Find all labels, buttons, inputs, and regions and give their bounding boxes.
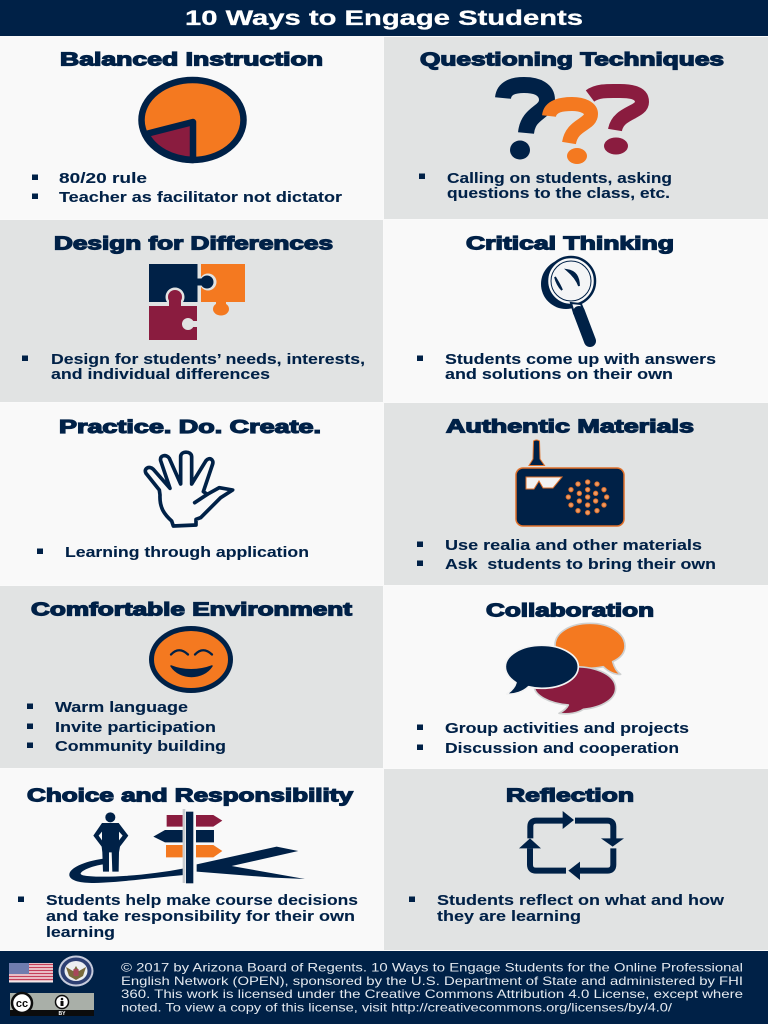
bullet list: Teacher as facilitator not dictator xyxy=(59,190,342,206)
panel: Collaboration xyxy=(384,586,768,768)
title banner: 10 Ways to Engage Students xyxy=(185,7,583,30)
copyright text xyxy=(121,960,743,1014)
icon: Creative Commons BY badge: cc xyxy=(16,998,28,1010)
panel: Authentic Materials xyxy=(384,403,768,585)
icon: question marks xyxy=(503,85,642,164)
heading: Collaboration: Collaboration xyxy=(486,600,654,620)
icon: smiley face xyxy=(152,628,230,690)
bullet list: Invite participation xyxy=(55,720,216,736)
heading: Practice. Do. Create.: Practice. Do. Create. xyxy=(59,417,321,437)
bullet list xyxy=(18,893,358,941)
footer band xyxy=(0,951,768,1024)
icon: pie chart xyxy=(142,80,244,160)
icon: cycle arrows xyxy=(519,811,624,880)
bullet list: Design for students’ needs, interests, xyxy=(51,352,365,368)
bullet list xyxy=(22,352,365,383)
heading: Authentic Materials: Authentic Materials xyxy=(446,416,694,436)
icon: speech bubbles xyxy=(505,623,625,714)
bullet list: and take responsibility for their own xyxy=(46,909,355,925)
bullet list: Calling on students, asking xyxy=(447,171,672,187)
panel: Practice. Do. Create. xyxy=(0,403,383,585)
bullet list: Warm language xyxy=(55,700,188,716)
icon: State Department seal xyxy=(58,956,94,986)
bullet list xyxy=(417,721,689,757)
bullet list: and individual differences xyxy=(51,367,270,383)
bullet list: Learning through application xyxy=(65,545,309,561)
bullet list: questions to the class, etc. xyxy=(447,186,670,202)
copyright text: noted. To view a copy of this license, visit http://creativecommons.org/licenses/by/4.0/ xyxy=(121,1000,673,1014)
icon: US flag xyxy=(9,963,53,982)
panel: Questioning Techniques xyxy=(384,37,768,219)
title banner xyxy=(0,0,768,36)
bullet list: they are learning xyxy=(437,909,581,925)
bullet list xyxy=(417,352,716,383)
icon: radio xyxy=(516,440,624,526)
heading: Questioning Techniques: Questioning Techniques xyxy=(420,50,724,70)
bullet list xyxy=(419,171,672,202)
panel: Design for Differences xyxy=(0,220,383,402)
bullet list: Students come up with answers xyxy=(445,352,716,368)
bullet list xyxy=(32,171,342,206)
panel: Reflection xyxy=(384,769,768,950)
panel: Critical Thinking xyxy=(384,220,768,402)
copyright text: 360. This work is licensed under the Creative Commons Attribution 4.0 License, except where xyxy=(121,987,743,1001)
bullet list: Students reflect on what and how xyxy=(437,893,725,909)
heading: Reflection: Reflection xyxy=(506,786,634,806)
panel: Comfortable Environment xyxy=(0,586,383,768)
bullet list: 80/20 rule xyxy=(59,171,147,187)
heading: Design for Differences: Design for Differences xyxy=(54,234,333,254)
icon: person at signpost on road xyxy=(69,809,305,883)
copyright text: © 2017 by Arizona Board of Regents. 10 Ways to Engage Students for the Online Professional xyxy=(121,960,743,974)
bullet list: Group activities and projects xyxy=(445,721,689,737)
bullet list: Community building xyxy=(55,739,226,755)
bullet list: Discussion and cooperation xyxy=(445,741,679,757)
heading: Choice and Responsibility: Choice and Responsibility xyxy=(27,786,353,806)
bullet list xyxy=(409,893,725,925)
heading: Comfortable Environment: Comfortable Environment xyxy=(31,600,352,620)
bullet list: Students help make course decisions xyxy=(46,893,358,909)
heading: Balanced Instruction: Balanced Instruction xyxy=(60,50,323,70)
bullet list xyxy=(27,700,226,755)
icon: open hand xyxy=(145,452,233,526)
bullet list: Ask students to bring their own xyxy=(445,557,716,573)
icon: puzzle pieces xyxy=(149,264,245,340)
bullet list: learning xyxy=(46,925,115,941)
heading: Critical Thinking: Critical Thinking xyxy=(466,234,674,254)
icon: Creative Commons BY badge: BY xyxy=(59,1011,66,1017)
panel: Choice and Responsibility xyxy=(0,769,383,950)
icon: magnifying glass xyxy=(541,257,595,341)
bullet list: and solutions on their own xyxy=(445,367,673,383)
bullet list: Use realia and other materials xyxy=(445,538,702,554)
panel: Balanced Instruction xyxy=(0,37,383,219)
copyright text: English Network (OPEN), sponsored by the U.S. Department of State and administered by FHI xyxy=(121,974,743,988)
bullet list xyxy=(417,538,716,573)
icon: Creative Commons BY badge xyxy=(10,993,94,1017)
